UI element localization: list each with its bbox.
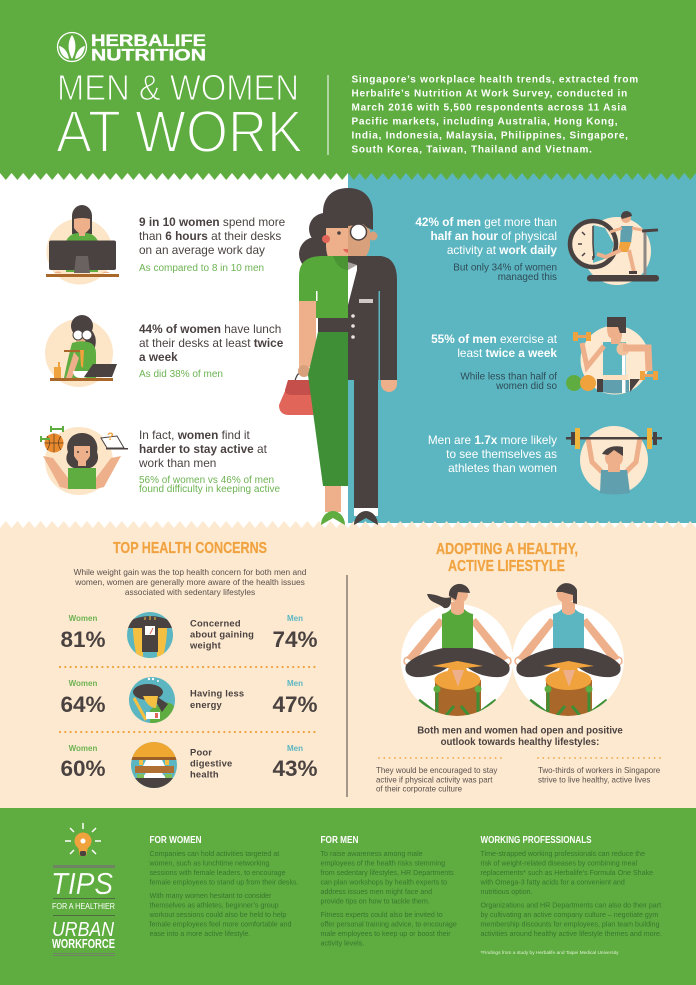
text: 9 in 10 women: than 6 hours at their desks xyxy=(139,229,281,243)
tips: for women: female employees to stand up from their desks. xyxy=(150,878,299,886)
text: 42% of men: activity at work daily xyxy=(447,243,557,257)
intro text: India, Indonesia, Malaysia, Philippines, Singapore, xyxy=(352,130,629,142)
intro paragraph: While weight gain was the top health concern for both men and xyxy=(74,567,307,577)
intro paragraph: women, women are generally more aware of the health issues xyxy=(74,577,305,587)
tips: for men: offer personal training advice, to encourage xyxy=(320,920,457,928)
icon: woman undecided between sport and work: ? xyxy=(107,431,114,443)
text: corporate culture xyxy=(376,766,497,794)
tips: for men: address issues men might face and xyxy=(320,888,432,896)
text: 9 in 10 women xyxy=(139,215,286,274)
text: 55% of men xyxy=(431,332,558,392)
tips: for men: To raise awareness among male xyxy=(320,850,423,858)
icon: sandwich at desk xyxy=(130,741,178,788)
text: positive outlook: Both men and women had open and positive xyxy=(417,726,623,736)
tips: working professionals: Time-strapped working professionals can reduce the xyxy=(480,850,645,858)
icon: monocle glasses xyxy=(350,224,366,240)
tips: for women: workout sessions could also be held to help xyxy=(148,911,286,919)
tips: working professionals: with Omega-3 fatty acids for a convenient and xyxy=(480,878,625,886)
text: positive outlook: outlook towards healthy lifestyles: xyxy=(441,737,599,748)
heading: top health concerns: TOP HEALTH CONCERNS xyxy=(113,540,267,557)
text: 42% of men xyxy=(415,215,557,283)
row: less energy: energy xyxy=(190,699,223,710)
tips: for women: themselves as athletes, beginner’s group xyxy=(150,902,279,910)
tips: working professionals: Organizations and HR Departments can also do their part xyxy=(480,902,661,910)
heading: adopting a healthy active lifestyle: ACTIVE LIFESTYLE xyxy=(448,558,565,575)
intro paragraph xyxy=(74,567,307,597)
intro text: Pacific markets, including Australia, Hong Kong, xyxy=(352,116,618,128)
text: 42% of men: half an hour of physical xyxy=(430,229,557,243)
title xyxy=(56,67,303,165)
tips title block: URBAN xyxy=(52,919,114,941)
text: corporate culture: They would be encouraged to stay xyxy=(376,766,497,775)
intro text xyxy=(352,74,639,156)
icon: man meditating xyxy=(512,583,624,718)
icon: man lifting barbell xyxy=(566,426,662,494)
text: two-thirds of workers: strive to live healthy, active lives xyxy=(538,776,650,784)
icon: Herbalife logo xyxy=(58,32,86,62)
text: harder to stay active: work than men xyxy=(138,456,216,470)
text: 55% of men: least twice a week xyxy=(457,346,557,360)
row: poor digestion: 60% xyxy=(60,756,106,781)
tips: working professionals: nutritious option. xyxy=(480,888,533,896)
row: poor digestion: digestive xyxy=(190,758,232,768)
logo text: NUTRITION xyxy=(91,46,206,64)
tips: for women: sessions with female leaders, to encourage xyxy=(150,869,286,877)
panel: header xyxy=(0,0,696,173)
text: 9 in 10 women: As compared to 8 in 10 men xyxy=(139,263,264,274)
text: 9 in 10 women: on an average work day xyxy=(139,243,265,257)
row: poor digestion: Poor xyxy=(190,746,212,758)
tips: for men: Fitness experts could also be invited to xyxy=(320,911,443,919)
row: less energy: Having less xyxy=(190,688,244,698)
tips: working professionals: WORKING PROFESSIONALS xyxy=(480,835,592,846)
text: two-thirds of workers xyxy=(538,766,661,784)
tips: working professionals: risk of weight-related diseases by combining meal xyxy=(480,860,637,868)
text: 44% of women: As did 38% of men xyxy=(139,369,223,380)
tips: for men: male employees to keep up or boost their xyxy=(320,930,451,938)
text: harder to stay active: found difficulty in keeping active xyxy=(139,484,280,495)
tips: for men: from sedentary lifestyles, HR Departments xyxy=(320,869,454,877)
text: 1.7x: athletes than women xyxy=(448,461,557,475)
icon: man with dumbbells xyxy=(566,317,658,394)
text: 55% of men: women did so xyxy=(495,381,557,392)
row: less energy: Men xyxy=(287,679,303,688)
icon: woman meditating xyxy=(401,584,513,718)
tips: for women: With many women hesitant to consider xyxy=(150,892,272,900)
text: 42% of men: But only 34% of women xyxy=(453,262,557,274)
tips: working professionals: replacements* such as Herbalife’s Formula One Shake xyxy=(480,869,653,877)
tips: for women: ease into a more active lifestyle. xyxy=(150,930,250,938)
text: corporate culture: active if physical activity was part xyxy=(376,776,493,784)
heading: adopting a healthy active lifestyle: ADOPTING A HEALTHY, xyxy=(436,541,578,558)
text: 44% of women: at their desks at least twice xyxy=(139,336,284,350)
row: gaining weight: weight xyxy=(189,640,221,650)
panel: tips footer xyxy=(0,808,696,985)
tips: for men: can plan workshops by health experts to xyxy=(320,878,447,886)
tips: for men: provide tips on how to tackle them. xyxy=(320,898,430,906)
tips: for women: Companies can hold activities targeted at xyxy=(150,850,279,858)
text: 1.7x: Men are 1.7x more likely xyxy=(428,433,557,447)
tips: working professionals: activities around healthy active lifestyle themes and more. xyxy=(480,930,662,938)
text: 44% of women: 44% of women have lunch xyxy=(139,322,281,336)
row: gaining weight: Women xyxy=(69,614,97,623)
logo text xyxy=(91,32,206,64)
tips: for women: FOR WOMEN xyxy=(150,835,202,846)
row: poor digestion: health xyxy=(190,768,219,780)
text: 42% of men: 42% of men get more than xyxy=(415,215,557,229)
footnote: *Findings from a study by Herbalife and Taipei Medical University xyxy=(480,950,619,956)
tips: for women: female employees feel more comfortable and xyxy=(150,920,292,928)
text: two-thirds of workers: Two-thirds of workers in Singapore xyxy=(538,766,661,775)
tips: for men xyxy=(320,835,457,948)
row: gaining weight: 81% xyxy=(60,627,106,652)
intro text: South Korea, Taiwan, Thailand and Vietnam. xyxy=(352,144,593,156)
icon: tired woman xyxy=(129,677,176,726)
panel: adopting a healthy lifestyle xyxy=(376,541,664,794)
icon: woman at desk xyxy=(46,205,119,284)
icon: woman lunch at desk xyxy=(45,315,117,387)
text: 9 in 10 women: 9 in 10 women spend more xyxy=(139,215,286,229)
tips title block: WORKFORCE xyxy=(52,937,115,951)
text: harder to stay active: 56% of women vs 46% of men xyxy=(139,475,274,486)
tips: for men: activity levels. xyxy=(320,940,364,948)
row: gaining weight: about gaining xyxy=(190,628,254,640)
tips: for women: women, such as lunchtime networking xyxy=(148,860,269,868)
tips: working professionals: by cultivating an active company culture – negotiate gym xyxy=(480,911,658,919)
intro text: Herbalife’s Nutrition At Work Survey, conducted in xyxy=(352,88,628,100)
row: gaining weight: Men xyxy=(287,614,303,623)
text: 44% of women: a week xyxy=(139,350,178,364)
row: less energy xyxy=(60,677,318,726)
tips title block: TIPS xyxy=(51,866,113,901)
text: 44% of women xyxy=(139,322,284,380)
intro paragraph: associated with sedentary lifestyles xyxy=(125,587,255,597)
man half xyxy=(348,188,397,525)
row: gaining weight xyxy=(60,612,318,658)
row: less energy: 64% xyxy=(60,692,106,717)
tips title block: FOR A HEALTHIER xyxy=(52,902,115,911)
text: 42% of men: managed this xyxy=(498,272,557,283)
panel: top health concerns xyxy=(60,540,319,788)
text: harder to stay active xyxy=(138,428,280,495)
text: harder to stay active: In fact, women find it xyxy=(139,428,251,442)
row: gaining weight: Concerned xyxy=(190,618,241,628)
intro text: March 2016 with 5,500 respondents across 11 Asia xyxy=(352,102,627,114)
text: 55% of men: 55% of men exercise at xyxy=(431,332,558,346)
text: positive outlook xyxy=(417,726,623,748)
text: harder to stay active: harder to stay active at xyxy=(139,442,268,456)
woman half xyxy=(298,188,349,525)
text: 1.7x: to see themselves as xyxy=(446,447,557,461)
row: less energy: Women xyxy=(69,679,97,688)
tips: for men: FOR MEN xyxy=(320,835,358,846)
row: poor digestion xyxy=(60,741,318,788)
icon: woman undecided between sport and work xyxy=(41,426,128,495)
text: 1.7x xyxy=(428,433,557,475)
intro text: Singapore’s workplace health trends, extracted from xyxy=(352,74,639,86)
text: corporate culture: of their corporate culture xyxy=(376,784,463,794)
icon: clock and treadmill runner xyxy=(570,211,659,285)
title: AT WORK xyxy=(56,99,303,165)
panel: cream lower section xyxy=(0,528,696,808)
row: less energy: 47% xyxy=(272,692,318,717)
row: poor digestion: Men xyxy=(287,744,303,753)
text: 55% of men: While less than half of xyxy=(460,372,557,382)
logo text: HERBALIFE xyxy=(91,32,206,50)
row: gaining weight: 74% xyxy=(272,627,318,652)
tips: working professionals xyxy=(480,835,662,956)
figure: half woman half man xyxy=(279,188,397,525)
tips: for women xyxy=(148,835,299,938)
tips: for men: employees of the health risks stemming xyxy=(320,860,445,868)
title: MEN & WOMEN xyxy=(57,67,299,108)
row: poor digestion: Women xyxy=(69,744,97,753)
tips: working professionals: membership discounts for employees, plan team building xyxy=(480,920,660,928)
icon: handbag xyxy=(279,372,316,415)
icon: weighing scale xyxy=(127,612,173,658)
heading: adopting a healthy active lifestyle xyxy=(436,541,578,575)
tips title block xyxy=(51,865,115,956)
icon: light bulb xyxy=(65,823,101,856)
row: poor digestion: 43% xyxy=(272,756,318,781)
